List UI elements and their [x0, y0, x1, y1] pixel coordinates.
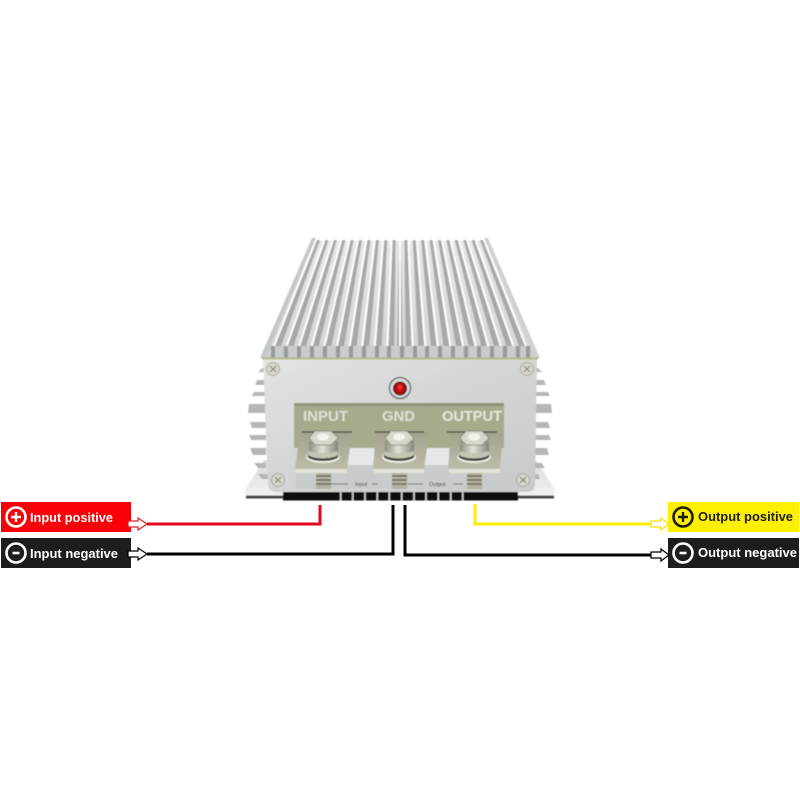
arrow: input negative	[128, 548, 147, 560]
wire: input negative	[147, 505, 393, 554]
black vent slots	[283, 491, 518, 501]
device: DC converter	[245, 238, 555, 501]
corner screws	[266, 362, 534, 486]
icon: plus	[674, 508, 692, 526]
label: output negative: Output negative	[698, 545, 797, 560]
base plate	[245, 460, 555, 498]
heatsink	[260, 238, 540, 360]
faceplate	[263, 360, 537, 492]
icon: plus	[6, 508, 26, 526]
terminal: output	[448, 431, 503, 489]
side fins right	[534, 368, 552, 479]
heatsink fin shadows	[275, 240, 525, 346]
label: input negative	[1, 538, 131, 568]
arrow: output negative	[651, 549, 669, 561]
wire: input positive	[147, 505, 320, 524]
arrow: input positive	[128, 518, 147, 530]
icon: minus	[6, 544, 26, 562]
arrow: output positive	[651, 518, 669, 530]
heatsink fin end blocks	[271, 346, 530, 358]
panel text: INPUT: INPUT	[303, 409, 348, 425]
terminal: input	[295, 431, 352, 489]
label panel	[294, 403, 505, 489]
label: output positive: Output positive	[698, 509, 793, 524]
wire: output negative	[405, 505, 651, 555]
label: input positive	[1, 502, 131, 532]
small print: Output	[408, 482, 463, 488]
panel text: GND: GND	[382, 409, 415, 425]
indicator LED	[389, 377, 411, 399]
label: output negative	[668, 538, 799, 568]
panel text: OUTPUT: OUTPUT	[442, 409, 502, 425]
heatsink fin highlights	[274, 240, 526, 346]
small print: Input: Input	[355, 482, 368, 488]
small print: Output: Output	[429, 482, 446, 488]
label: input positive: Input positive	[30, 510, 113, 525]
terminal: GND	[373, 431, 429, 489]
wire: output positive	[475, 504, 651, 524]
small print: Input	[331, 482, 378, 488]
label: input negative: Input negative	[30, 546, 118, 561]
side fins left	[248, 368, 268, 479]
label: output positive	[668, 502, 799, 532]
icon: minus	[674, 544, 692, 562]
